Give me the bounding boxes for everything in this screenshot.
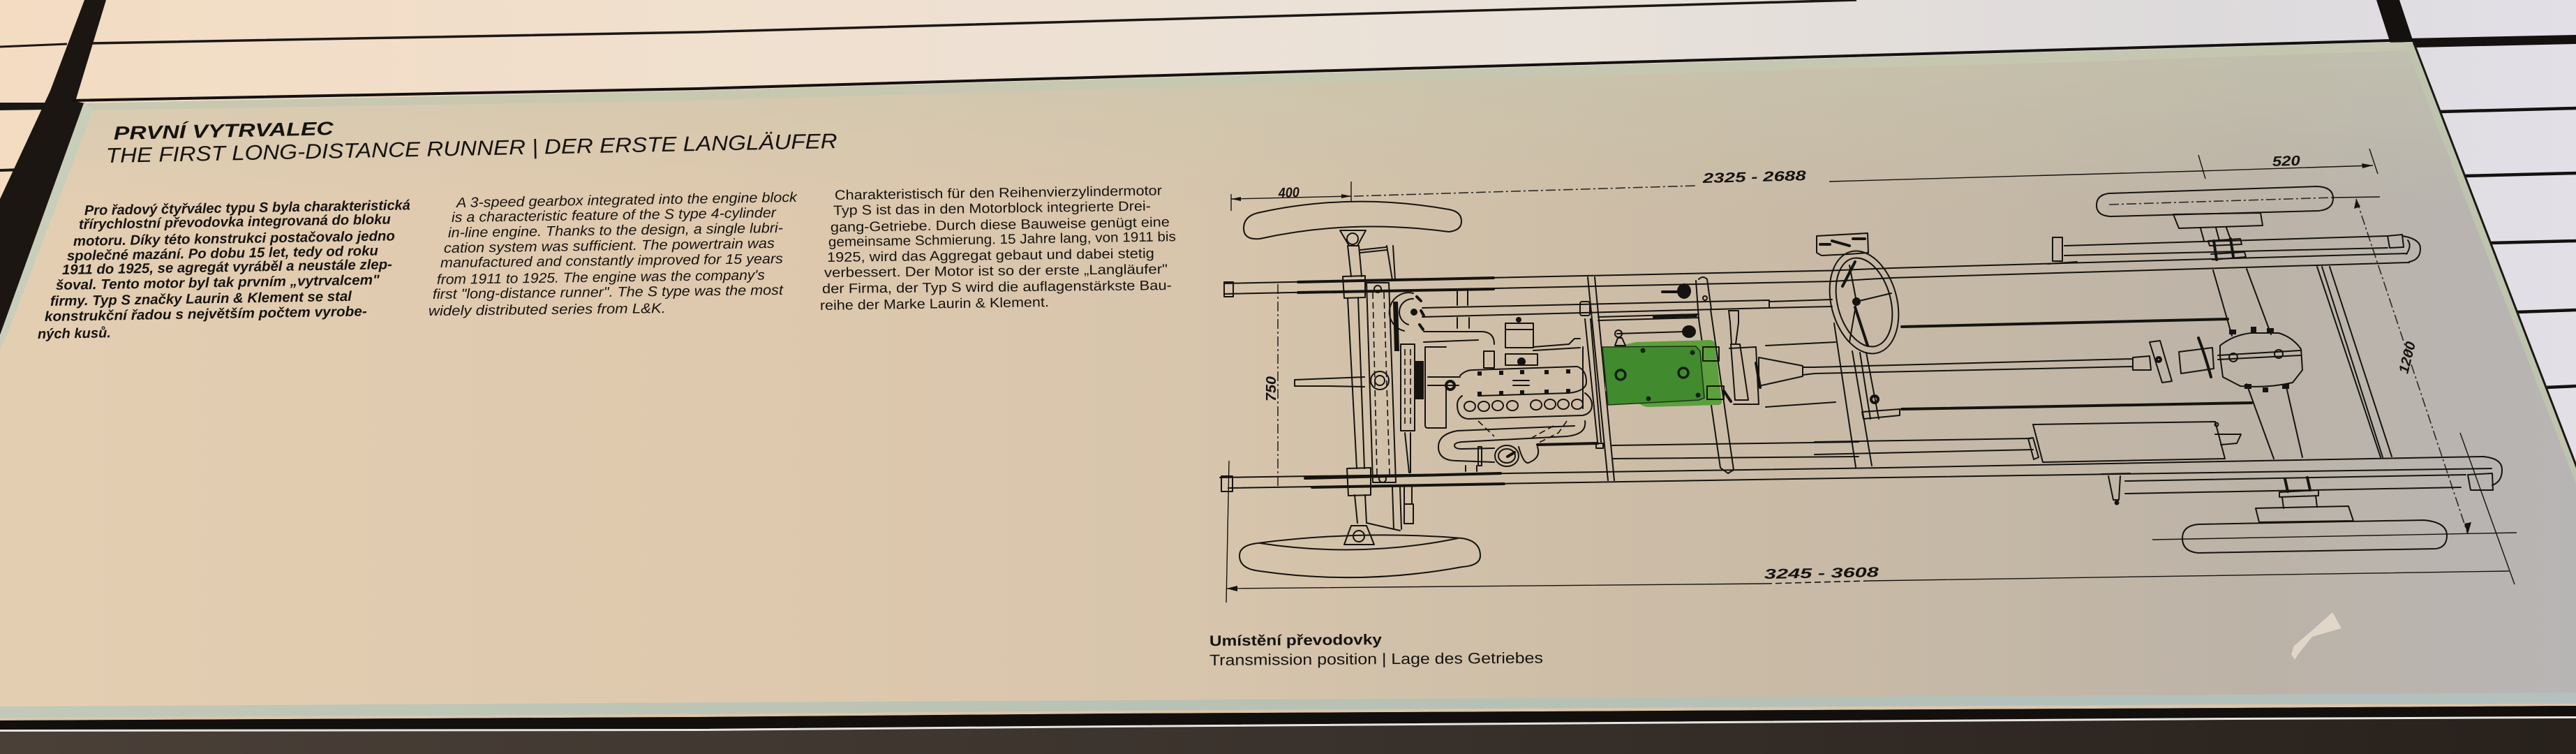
text block: Czech bbox=[38, 198, 410, 342]
chassis technical drawing bbox=[1220, 149, 2517, 603]
cross members bbox=[1422, 267, 2392, 480]
title: PRVNÍ VYTRVALEC bbox=[113, 117, 334, 144]
text block: English bbox=[429, 190, 798, 319]
text block: English: manufactured and constantly improved for 15 years bbox=[440, 251, 783, 271]
propeller shaft bbox=[1815, 338, 2214, 383]
gearbox highlighted in green bbox=[1602, 340, 1722, 407]
text block: Czech: společné mazání. Po dobu 15 let, tedy od roku bbox=[67, 244, 378, 264]
frame rails bbox=[1220, 235, 2502, 491]
dimension lines and numbers: 3245 - 3608 bbox=[1764, 565, 1879, 582]
dimension lines and numbers: 2325 - 2688 bbox=[1702, 168, 1807, 186]
rear axle with differential bbox=[2213, 269, 2302, 459]
caption: Umístění převodovky bbox=[1209, 632, 1382, 649]
text block: German: reihe der Marke Laurin & Klement. bbox=[820, 295, 1049, 313]
text block: German bbox=[820, 183, 1176, 313]
text block: Czech: firmy. Typ S značky Laurin & Klement se stal bbox=[50, 289, 352, 309]
text block: English: A 3-speed gearbox integrated into the engine block bbox=[456, 190, 798, 211]
text block: English: first "long-distance runner". The S type was the most bbox=[433, 283, 784, 302]
brake rods bbox=[1862, 319, 2251, 419]
text block: Czech: Pro řadový čtyřválec typu S byla charakteristická bbox=[84, 198, 410, 219]
battery box bbox=[2028, 422, 2241, 462]
text block: German: verbessert. Der Motor ist so der erste „Langläufer" bbox=[824, 262, 1168, 281]
dimension lines and numbers: 1200 bbox=[2397, 340, 2419, 375]
text block: German: 1925, wird das Aggregat gebaut und dabei stetig bbox=[827, 246, 1154, 265]
text block: English: from 1911 to 1925. The engine was the company's bbox=[437, 267, 765, 288]
front axle bbox=[1295, 246, 1413, 531]
text block: German: gang-Getriebe. Durch diese Bauweise genügt eine bbox=[831, 214, 1170, 235]
dimension lines and numbers bbox=[1226, 149, 2517, 603]
dimension lines and numbers: 520 bbox=[2272, 154, 2300, 170]
text block: German: Charakteristisch für den Reihenvierzylindermotor bbox=[835, 183, 1163, 203]
text block: Czech: motoru. Díky této konstrukci postačovalo jedno bbox=[73, 228, 395, 249]
text block: English: in-line engine. Thanks to the design, a single lubri- bbox=[448, 221, 783, 241]
dimension lines and numbers: 750 bbox=[1264, 376, 1279, 401]
steering wheel bbox=[1817, 233, 1909, 419]
caption: Transmission position | Lage des Getriebes bbox=[1209, 649, 1543, 669]
text block: English: cation system was sufficient. The powertrain was bbox=[444, 236, 775, 256]
text block: Czech: třírychlostní převodovka integrovaná do bloku bbox=[79, 212, 391, 232]
caption bbox=[1209, 632, 1543, 669]
text block: German: Typ S ist das in den Motorblock integrierte Drei- bbox=[833, 198, 1151, 219]
text block: English: widely distributed series from L&K. bbox=[429, 301, 666, 319]
gear linkage and bell housing bbox=[1615, 277, 1836, 407]
text block: Czech: šoval. Tento motor byl tak prvním „vytrvalcem" bbox=[56, 272, 380, 293]
engine bbox=[1390, 293, 1592, 473]
title: THE FIRST LONG-DISTANCE RUNNER | DER ERSTE LANGLÄUFER bbox=[105, 130, 837, 168]
title bbox=[105, 117, 837, 168]
reflection on the glass bbox=[2291, 612, 2342, 660]
text block: German: der Firma, der Typ S wird die auflagenstärkste Bau- bbox=[822, 278, 1172, 297]
text block: German: gemeinsame Schmierung. 15 Jahre lang, von 1911 bis bbox=[828, 229, 1176, 250]
rear springs and tyres bbox=[2048, 186, 2466, 553]
text block: Czech: 1911 do 1925, se agregát vyráběl a neustále zlep- bbox=[62, 257, 392, 278]
dimension lines and numbers: 400 bbox=[1278, 185, 1300, 201]
text block: Czech: ných kusů. bbox=[38, 325, 111, 342]
front wheels bbox=[1239, 202, 1480, 577]
text block: English: is a characteristic feature of the S type 4-cylinder bbox=[452, 205, 777, 226]
plinth under the panel bbox=[0, 706, 2576, 754]
text block: Czech: konstrukční řadou s největším počtem vyrobe- bbox=[45, 304, 367, 325]
